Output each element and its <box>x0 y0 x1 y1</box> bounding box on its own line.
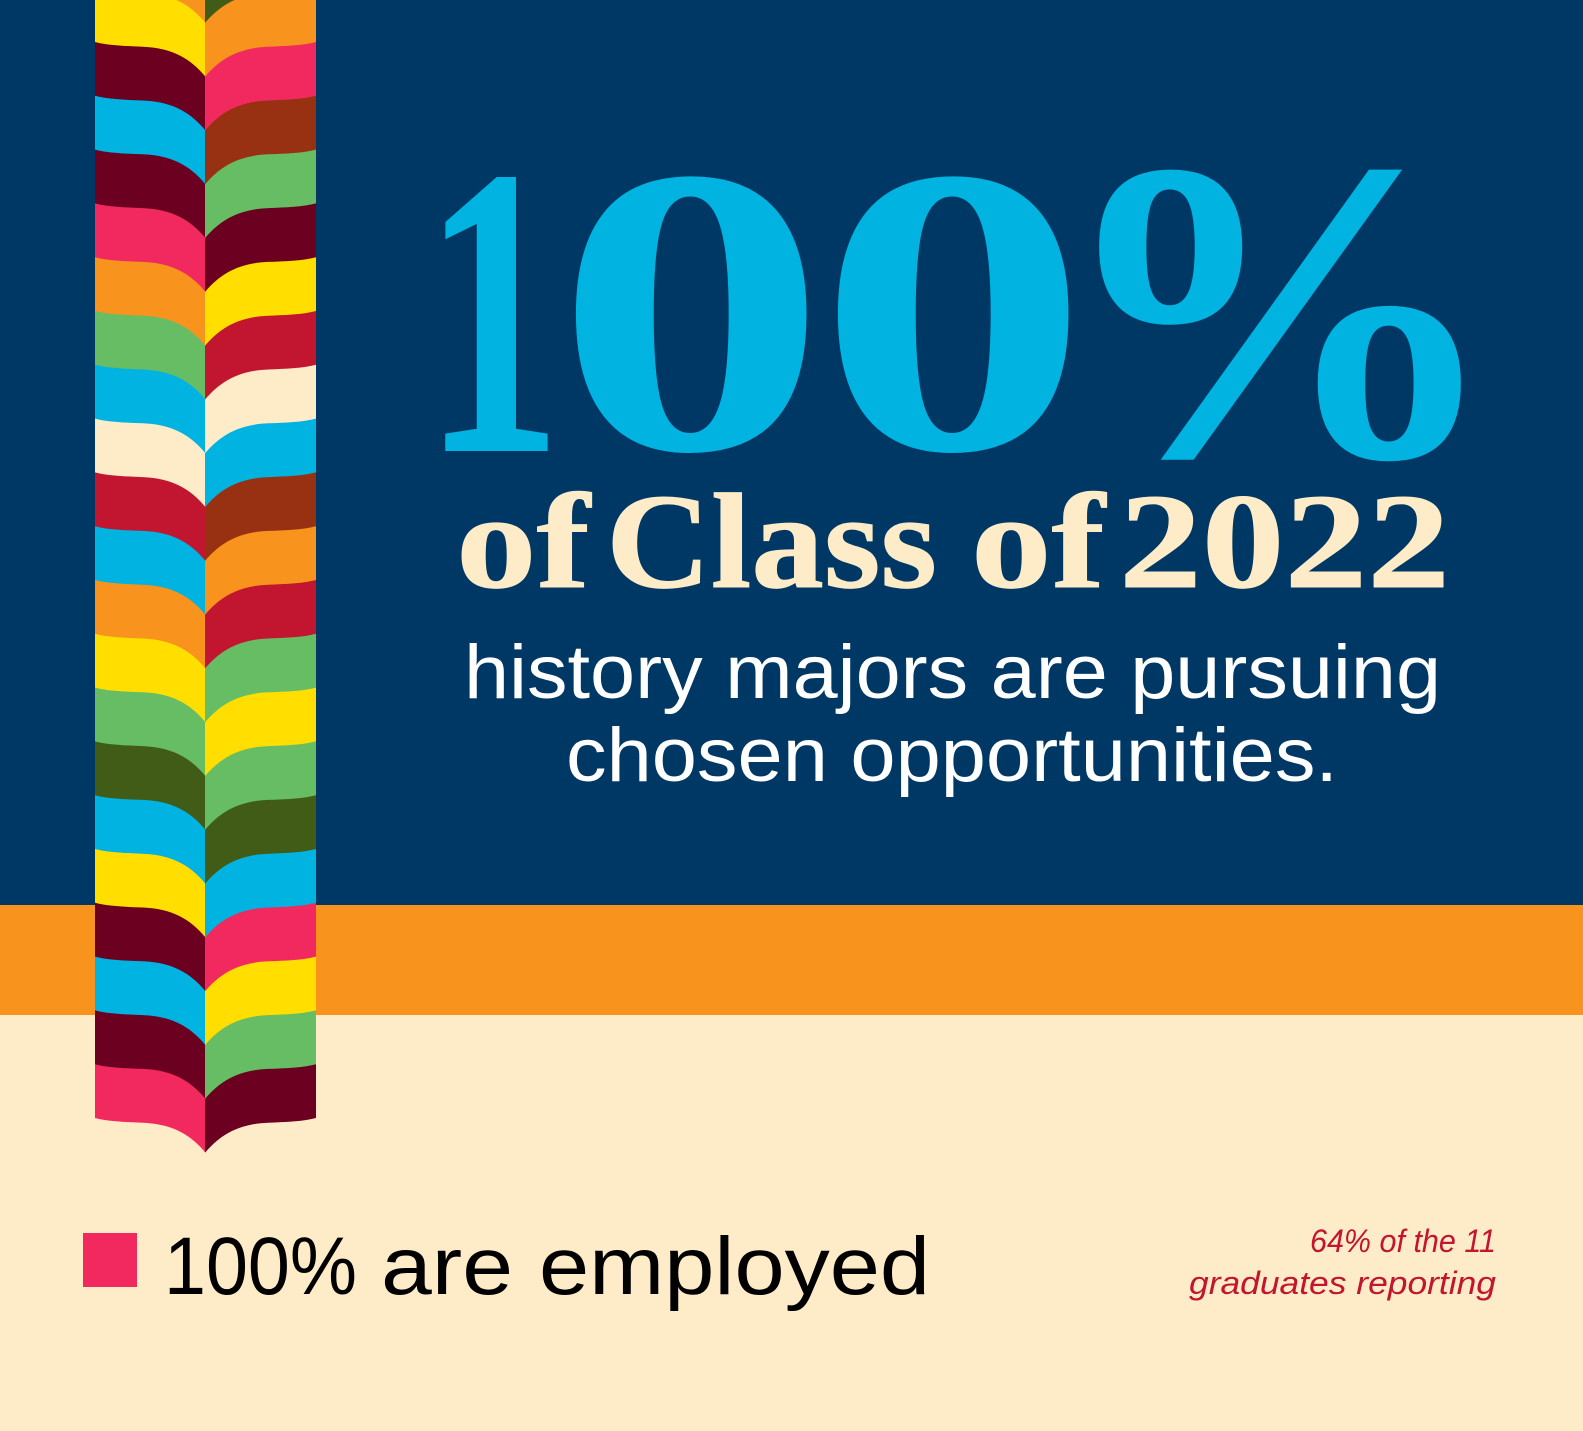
title: 100%: 0 <box>555 85 827 538</box>
legend label: 100% are employed: employed <box>539 1221 930 1312</box>
text block: history majors are pursuing chosen opportunities: history majors are pursuing <box>464 630 1441 715</box>
text block: history majors are pursuing chosen opportunities: chosen opportunities. <box>566 713 1338 798</box>
ribbon: multicolour chevron stripe <box>95 0 316 1153</box>
title: 100% <box>423 74 1503 549</box>
title: 100%: 1 <box>423 82 562 541</box>
heading: of Class of 2022 <box>456 467 1450 617</box>
legend label: 100% are employed: are <box>381 1221 513 1312</box>
title: 100%: % <box>1053 74 1503 549</box>
panel: cream background <box>0 1015 1583 1431</box>
footnote: 64% of the 11 graduates reporting: graduates reporting <box>1189 1265 1496 1301</box>
text block: history majors are pursuing chosen opportunities <box>464 630 1441 798</box>
heading: of Class of 2022: of <box>971 467 1107 617</box>
footnote: 64% of the 11 graduates reporting: 64% of the 11 <box>1310 1223 1496 1259</box>
heading: of Class of 2022: Class <box>606 467 937 617</box>
legend label: 100% are employed: 100% <box>164 1221 357 1312</box>
icon: pink legend square <box>83 1233 137 1287</box>
panel: navy background <box>0 0 1583 905</box>
heading: of Class of 2022: of <box>456 467 592 617</box>
panel: orange band <box>0 905 1583 1015</box>
title: 100%: 0 <box>817 85 1089 538</box>
heading: of Class of 2022: 2022 <box>1119 467 1450 617</box>
legend label: 100% are employed <box>164 1221 930 1312</box>
footnote: 64% of the 11 graduates reporting <box>1189 1223 1496 1301</box>
